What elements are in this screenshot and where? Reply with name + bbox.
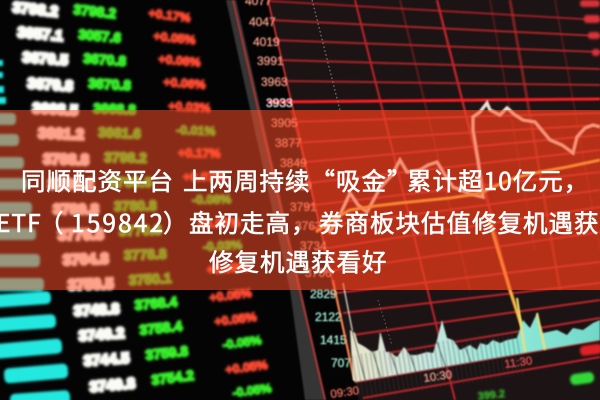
time axis labels: 10:30: [423, 369, 453, 385]
green ticker column: 3768.4: [134, 293, 178, 313]
white ticker column: 3798.2: [48, 176, 94, 193]
title line 1: [21, 163, 589, 198]
white ticker column: 3744.5: [83, 350, 130, 370]
percentage ticker column: +0.05%: [214, 310, 257, 329]
price axis labels: 3991: [257, 54, 284, 68]
price axis labels: 3763: [295, 219, 322, 233]
green ticker column: 3750.1: [128, 270, 172, 288]
volume axis labels: 2122: [315, 310, 342, 324]
white ticker column: 3764.8: [63, 250, 109, 269]
white ticker column: 3780.8: [53, 201, 99, 218]
white ticker column: 3670.5: [22, 49, 69, 69]
percentage ticker column: -0.08%: [192, 192, 231, 207]
volume axis labels: [310, 287, 351, 370]
percentage ticker column: -0.01%: [176, 123, 216, 138]
price axis labels: 3905: [271, 116, 298, 130]
price axis labels: 3963: [261, 75, 288, 89]
white ticker column: 3798.8: [43, 151, 89, 169]
green ticker column: 3770.8: [119, 222, 162, 239]
title line 2: [0, 205, 600, 240]
white ticker column: 3670.8: [27, 75, 74, 95]
percentage ticker column: +0.05%: [225, 358, 268, 377]
chart left border: [333, 280, 354, 380]
price axis labels: 3849: [280, 156, 307, 170]
title line 2: ）: [163, 205, 188, 240]
green ticker column: 3754.2: [150, 367, 195, 388]
title line 3: 修复机遇获看好: [209, 244, 388, 279]
percentage ticker column: +0.05%: [198, 216, 240, 231]
title line 2: 159842: [71, 205, 165, 240]
percentage ticker column: +0.03%: [168, 99, 211, 115]
green and red readouts: [477, 343, 600, 400]
volume axis labels: 1415: [320, 333, 347, 347]
grid lines: [233, 0, 600, 400]
percentage ticker column: +0.06%: [158, 52, 201, 70]
white ticker column: 3057.1: [17, 24, 64, 45]
percentage ticker column: +0.05%: [209, 286, 252, 305]
green ticker column: 3668.8: [93, 100, 136, 118]
title line 2: 券商板块估值修复机遇获: [319, 205, 600, 240]
white ticker column: 3750.5: [68, 275, 114, 294]
white ticker column: [12, 0, 136, 396]
green ticker column: 3670.8: [83, 50, 127, 69]
volume axis labels: 707: [331, 356, 351, 370]
green ticker column: [73, 1, 195, 388]
time axis labels: 11:30: [504, 355, 533, 371]
green ticker column: 3057.6: [78, 26, 122, 46]
right edge blurred labels: [580, 0, 600, 56]
green ticker column: 3778.8: [124, 246, 167, 263]
price axis labels: 3706: [305, 266, 332, 280]
green ticker column: 3670.8: [88, 75, 132, 93]
white ticker column: 3748.8: [73, 301, 120, 320]
dotted white grid line: [312, 0, 340, 110]
white ticker column: 3740.8: [89, 375, 136, 396]
intraday average line: [316, 160, 600, 232]
title line 1: 同顺配资平台: [21, 163, 174, 198]
white ticker column: 3668.5: [32, 100, 79, 119]
percentage ticker column: [148, 6, 272, 400]
white ticker column: 3661.2: [38, 125, 84, 144]
price axis labels: 3877: [275, 136, 302, 150]
price axis labels: 3933: [266, 96, 293, 110]
price axis labels: 4019: [253, 35, 280, 49]
green ticker column: 3780.6: [109, 174, 152, 190]
title line 2: 盘初走高，: [189, 205, 316, 240]
percentage ticker column: -0.05%: [232, 381, 272, 400]
percentage ticker column: +0.17%: [148, 6, 191, 25]
percentage ticker column: +0.06%: [163, 75, 206, 92]
intraday price curve: [323, 103, 600, 232]
time axis labels: [330, 355, 533, 400]
title line 1: 累计超10亿元，: [407, 163, 589, 198]
green ticker column: 3759.8: [145, 343, 189, 363]
white ticker column: 3746.2: [78, 325, 125, 345]
percentage ticker column: +0.07%: [183, 170, 225, 184]
white ticker column: 3770.8: [58, 226, 104, 244]
green ticker column: 3758.4: [139, 318, 183, 338]
price axis labels: 3734: [300, 239, 327, 253]
percentage ticker column: +0.05%: [153, 29, 196, 47]
price axis labels: 3791: [290, 200, 317, 214]
price axis labels: [245, 0, 332, 280]
title line 1: 上两周持续“吸金”: [183, 163, 412, 198]
green ticker column: 3798.2: [73, 1, 117, 21]
percentage ticker column: -0.03%: [202, 238, 242, 254]
cyan ticker column: [0, 60, 71, 400]
volume bars: [343, 283, 600, 382]
translucent orange band: [0, 110, 600, 290]
percentage ticker column: +0.09%: [206, 260, 249, 277]
percentage ticker column: +0.17%: [178, 146, 221, 161]
title line 2: （: [39, 205, 64, 240]
price axis labels: 3819: [285, 179, 312, 193]
volume axis labels: 2829: [310, 287, 337, 301]
grey slanted strip: [226, 0, 326, 400]
red grid tint: [268, 0, 600, 400]
percentage ticker column: -0.05%: [222, 333, 262, 352]
green ticker column: 3798.2: [104, 149, 147, 166]
green ticker column: 3780.8: [114, 197, 157, 214]
price axis labels: 4047: [249, 15, 276, 29]
green ticker column: 3661.6: [98, 124, 141, 142]
